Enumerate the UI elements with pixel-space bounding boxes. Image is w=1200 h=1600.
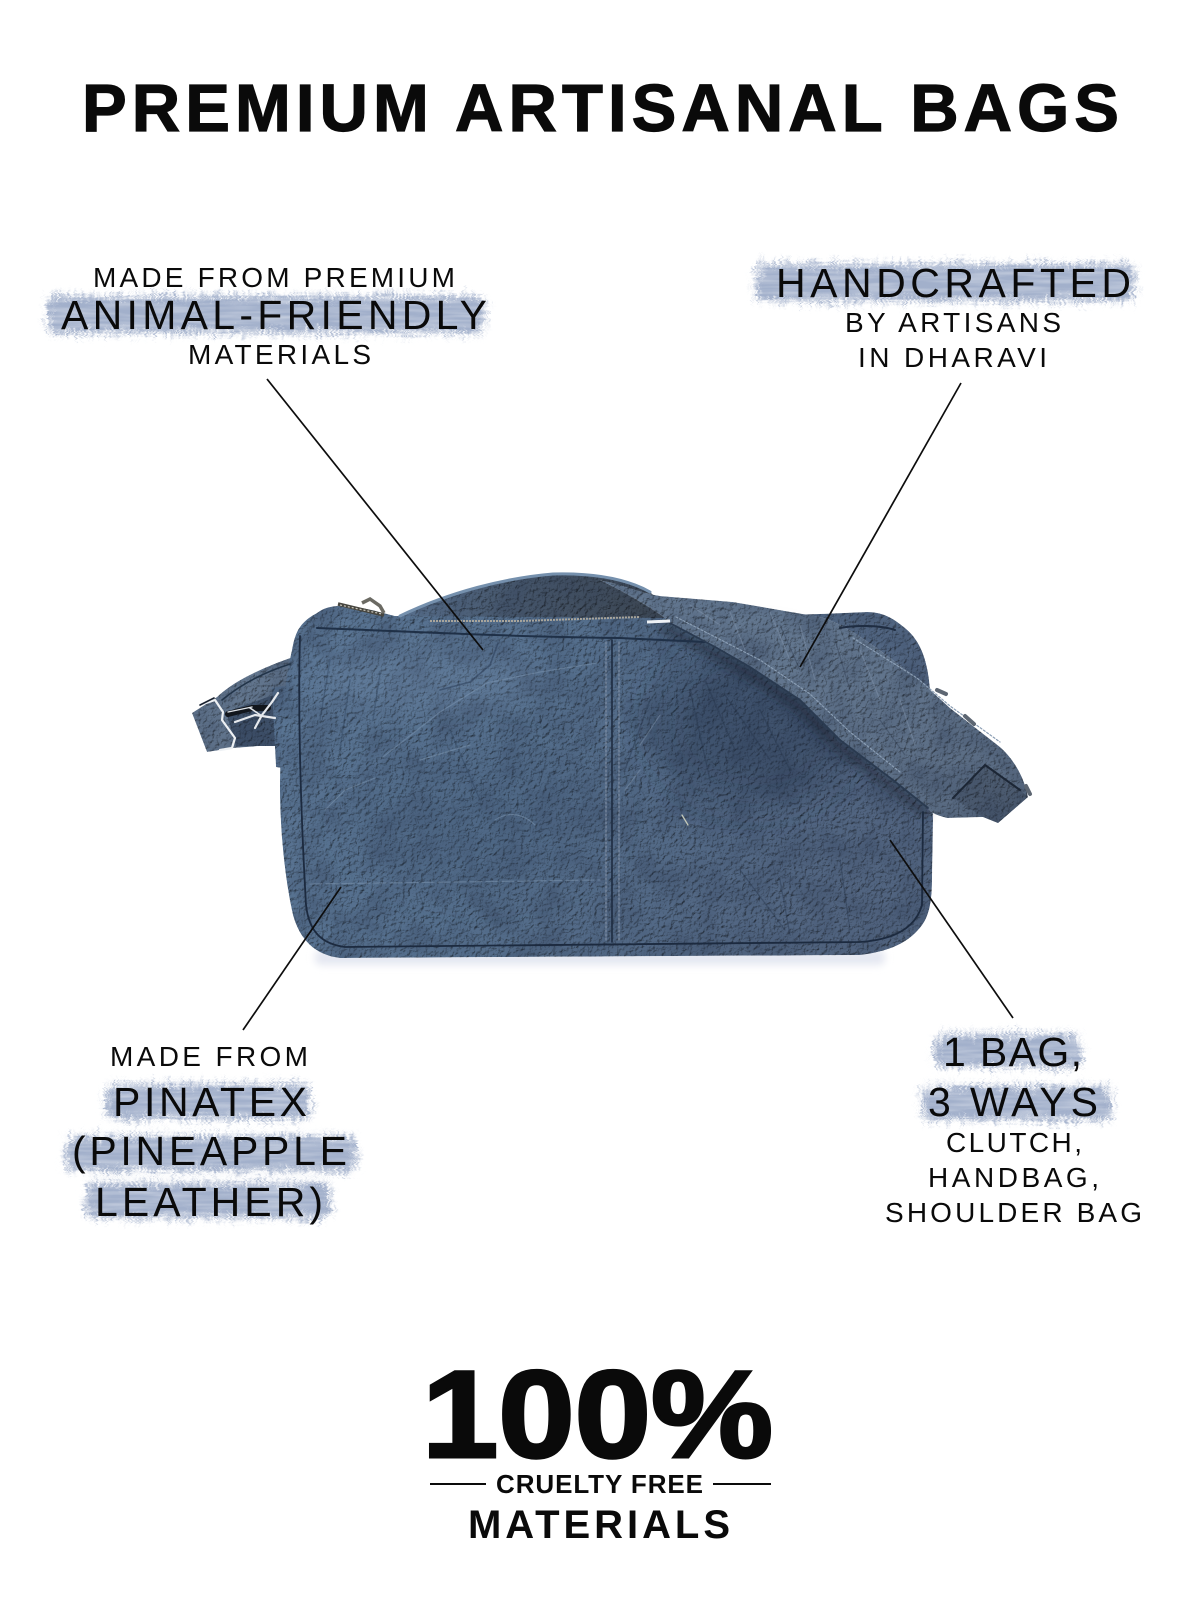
callout text: SHOULDER BAG <box>885 1197 1142 1228</box>
callout: made from pinatex <box>66 1041 356 1225</box>
leader line: pinatex <box>243 887 341 1030</box>
callout text <box>776 260 1131 373</box>
callout text: MATERIALS <box>188 339 371 370</box>
brush highlight <box>48 296 484 333</box>
callout text: ANIMAL-FRIENDLY <box>61 292 487 338</box>
callout text: MADE FROM <box>110 1041 308 1072</box>
callout text: IN DHARAVI <box>858 342 1047 373</box>
leader line: animal-friendly <box>267 379 483 650</box>
big percentage: 100% <box>422 1346 773 1484</box>
callout text <box>72 1041 347 1225</box>
callout text: PINATEX <box>113 1079 307 1125</box>
callout text: MADE FROM PREMIUM <box>93 262 455 293</box>
callout text: CLUTCH, <box>946 1127 1082 1158</box>
bag seams and stitching <box>222 574 923 947</box>
callout text: 3 WAYS <box>928 1079 1098 1125</box>
callout text: BY ARTISANS <box>845 307 1061 338</box>
callout text: HANDBAG, <box>928 1162 1099 1193</box>
leather creases on body <box>320 643 850 935</box>
cruelty free rule right <box>713 1483 771 1485</box>
callout text: (PINEAPPLE <box>72 1128 347 1174</box>
brush highlights <box>66 1084 356 1218</box>
callout: animal-friendly materials <box>48 262 487 370</box>
strap stitching and creases <box>668 605 1020 808</box>
bag leather shapes <box>192 573 933 958</box>
zipper <box>338 599 670 622</box>
metal strap clasp <box>200 690 1030 794</box>
title: PREMIUM ARTISANAL BAGS <box>82 71 1119 146</box>
brush highlights <box>922 1034 1112 1120</box>
callout text: LEATHER) <box>95 1179 323 1225</box>
brush highlight <box>756 264 1134 301</box>
bag ground shadow <box>315 950 885 965</box>
callout text <box>885 1029 1142 1228</box>
cruelty free rule left <box>430 1483 486 1485</box>
bag body shading <box>310 625 928 890</box>
leader line: 1 bag 3 ways <box>890 840 1013 1018</box>
callout text: 1 BAG, <box>943 1029 1082 1075</box>
cruelty free label: CRUELTY FREE <box>496 1469 703 1499</box>
badge: 100% cruelty free materials <box>422 1346 773 1547</box>
shoulder strap leather <box>600 580 1028 823</box>
materials label: MATERIALS <box>468 1503 730 1547</box>
callout: handcrafted by artisans <box>756 260 1134 373</box>
bag photograph illustration <box>192 573 1030 965</box>
callout text <box>61 262 487 370</box>
callout: 1 bag 3 ways <box>885 1029 1142 1228</box>
leader line: handcrafted <box>800 383 961 667</box>
callout text: HANDCRAFTED <box>776 260 1131 306</box>
